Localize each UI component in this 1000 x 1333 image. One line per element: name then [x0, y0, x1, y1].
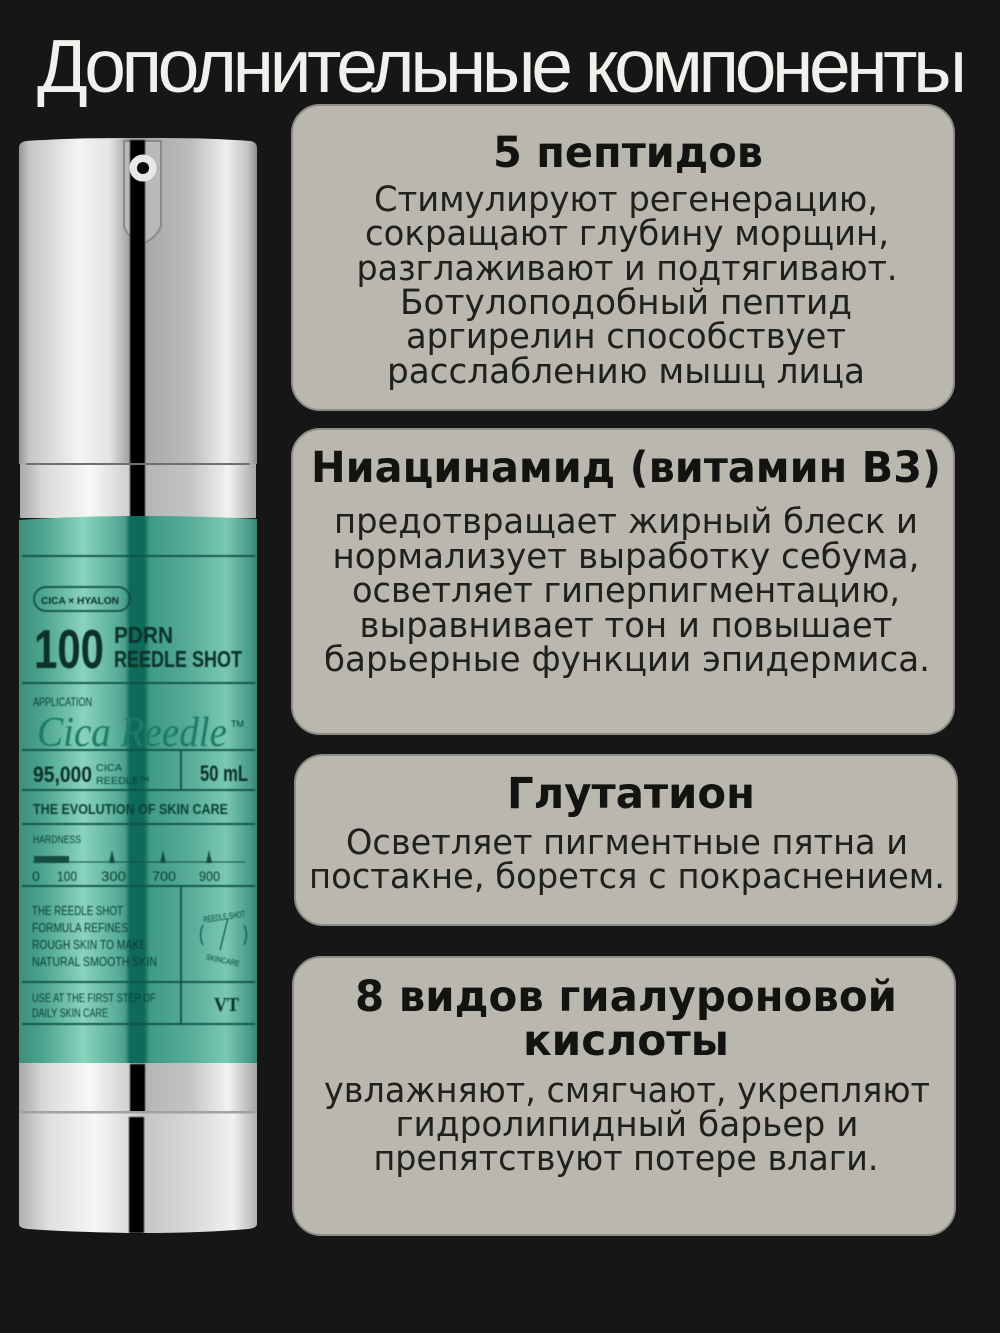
- bottle cap: [19, 138, 257, 464]
- hardness scale: 700: [152, 868, 176, 884]
- body text: предотвращает жирный блеск и: [334, 502, 918, 542]
- title: Дополнительные компоненты: [37, 24, 967, 108]
- specs row: [33, 761, 248, 787]
- teal label: [19, 516, 257, 1063]
- specs row: REEDLE™: [96, 775, 150, 787]
- hardness scale: 0: [32, 868, 40, 884]
- formula description: FORMULA REFINES: [32, 920, 128, 935]
- hardness scale: HARDNESS: [33, 834, 81, 846]
- usage note: DAILY SKIN CARE: [32, 1008, 108, 1020]
- heading: Глутатион: [507, 769, 755, 819]
- body text: [309, 823, 945, 897]
- pump nozzle ring: [133, 158, 153, 178]
- usage note: USE AT THE FIRST STEP OF: [32, 993, 156, 1005]
- silver base: [19, 1111, 257, 1233]
- body text: барьерные функции эпидермиса.: [324, 640, 930, 680]
- heading: Ниацинамид (витамин В3): [311, 443, 941, 493]
- hardness scale: 300: [101, 868, 126, 884]
- panel background: [292, 105, 954, 410]
- body text: разглаживают и подтягивают.: [356, 249, 898, 289]
- hardness scale: 100: [57, 868, 77, 884]
- heading: [355, 972, 897, 1066]
- panel: glutathione: [295, 755, 957, 925]
- body text: препятствуют потере влаги.: [374, 1139, 878, 1179]
- application: TM: [231, 719, 244, 729]
- heading: кислоты: [523, 1016, 729, 1066]
- brand mark: VT: [214, 994, 240, 1016]
- silver neck band: [20, 463, 256, 518]
- body text: нормализует выработку себума,: [332, 537, 920, 577]
- product name: [34, 618, 242, 680]
- round stamp: [201, 909, 246, 968]
- panel background: [295, 755, 957, 925]
- body text: постакне, борется с покраснением.: [309, 857, 945, 897]
- product name: 100: [34, 618, 104, 680]
- body text: аргирелин способствует: [406, 317, 846, 357]
- specs row: 95,000: [33, 762, 92, 787]
- round stamp: SKINCARE: [205, 953, 240, 968]
- application: Cica Reedle: [37, 710, 227, 756]
- body text: гидролипидный барьер и: [396, 1105, 858, 1145]
- label rule lines: [22, 556, 255, 1025]
- product name: REEDLE SHOT: [114, 646, 242, 672]
- product: serum bottle: [19, 138, 257, 1233]
- body text: Стимулируют регенерацию,: [374, 180, 878, 220]
- usage note: [32, 993, 156, 1020]
- body text: [324, 1071, 930, 1179]
- panel: 5 peptides: [292, 105, 954, 410]
- hardness scale: [32, 834, 245, 884]
- panel: niacinamide: [292, 429, 954, 734]
- heading: 5 пептидов: [493, 128, 763, 178]
- body text: Осветляет пигментные пятна и: [346, 823, 908, 863]
- formula description: NATURAL SMOOTH SKIN: [32, 954, 157, 969]
- body text: Ботулоподобный пептид: [400, 283, 852, 323]
- silver lower band: [19, 1063, 257, 1113]
- tagline: THE EVOLUTION OF SKIN CARE: [33, 801, 228, 818]
- product name: PDRN: [114, 622, 173, 648]
- formula description: THE REEDLE SHOT: [32, 903, 123, 918]
- specs row: CICA: [96, 762, 122, 774]
- panel: hyaluronic acid: [293, 957, 955, 1235]
- hardness scale: 900: [199, 868, 220, 884]
- body text: выравнивает тон и повышает: [360, 606, 892, 646]
- badge: cica x hyalon: [34, 587, 130, 611]
- body text: увлажняют, смягчают, укрепляют: [324, 1071, 930, 1111]
- body text: осветляет гиперпигментацию,: [352, 571, 900, 611]
- heading: 8 видов гиалуроновой: [355, 972, 897, 1022]
- application: APPLICATION: [33, 695, 92, 709]
- body text: расслаблению мышц лица: [387, 352, 865, 392]
- panel background: [292, 429, 954, 734]
- badge: cica x hyalon: CICA × HYALON: [41, 595, 119, 607]
- panel background: [293, 957, 955, 1235]
- formula description: [32, 903, 157, 969]
- body text: [324, 502, 930, 680]
- specs row: 50 mL: [200, 761, 248, 786]
- round stamp: REEDLE SHOT: [203, 909, 246, 925]
- body text: сокращают глубину морщин,: [365, 214, 889, 254]
- formula description: ROUGH SKIN TO MAKE: [32, 937, 146, 952]
- body text: [356, 180, 898, 392]
